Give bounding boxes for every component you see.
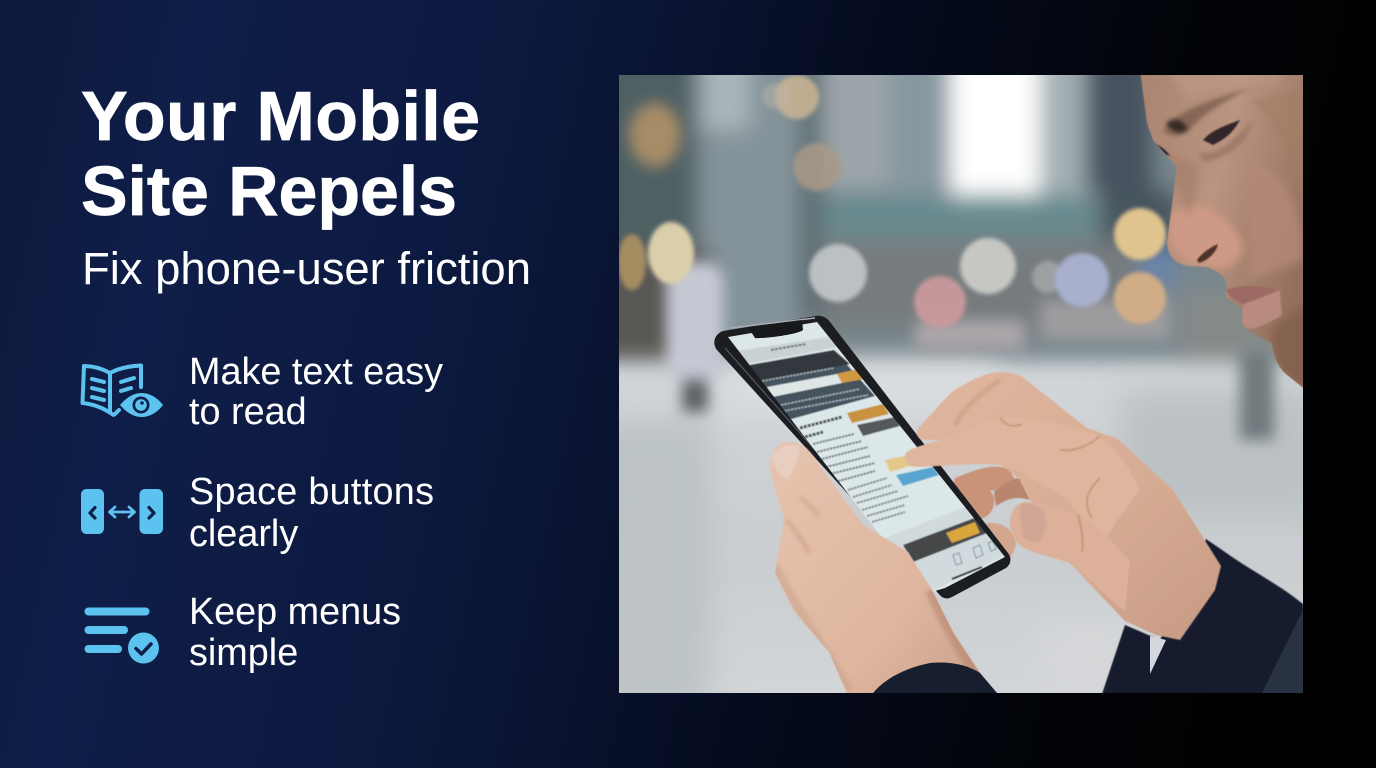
panel: street photo scene (619, 75, 1303, 693)
yellow button (946, 522, 980, 543)
dark header (744, 350, 850, 382)
smartphone (714, 316, 1010, 598)
jacket panel (1262, 610, 1303, 693)
knuckle shading (775, 497, 985, 690)
phone screen (728, 322, 1005, 592)
icon: book with eye (82, 366, 163, 417)
back of hand (917, 372, 1221, 640)
fingers behind the phone (954, 466, 1030, 558)
index finger (905, 418, 1139, 545)
title: Site Repels (81, 152, 457, 230)
phone body (714, 316, 1010, 598)
url bar (738, 337, 838, 364)
search button (836, 369, 864, 383)
blurred pedestrians (666, 262, 1274, 440)
blurred street (619, 346, 1303, 693)
light circles (618, 75, 1166, 328)
search field (767, 374, 842, 397)
content text lines (813, 434, 875, 482)
lower section tint (886, 508, 1002, 590)
subtitle: Fix phone-user friction (82, 243, 531, 294)
orange glow top left (629, 103, 681, 167)
left sleeve (868, 662, 1003, 700)
dark content band (744, 350, 875, 420)
list item: space buttons clearly (81, 471, 434, 555)
label text: to read (189, 391, 307, 433)
icon: menu with check (84, 608, 159, 664)
bottom dark band (903, 517, 987, 562)
title (81, 77, 480, 230)
man's face (1140, 70, 1310, 395)
band text (762, 368, 868, 411)
blue button (896, 467, 939, 486)
bottom nav icons (953, 541, 996, 565)
second text block (848, 478, 908, 522)
list item: make text easy to read (82, 351, 443, 433)
shirt cuff (1150, 636, 1166, 674)
phone side edge highlight (724, 348, 818, 455)
home indicator (952, 567, 982, 579)
label text: Make text easy (189, 351, 443, 393)
left hand holding the phone (770, 442, 984, 693)
title: Your Mobile (81, 77, 480, 155)
thumbnail (1020, 504, 1046, 542)
right sleeve (1100, 539, 1310, 700)
gray button (857, 417, 900, 436)
street shading patches (600, 365, 1320, 710)
pale orange button (885, 455, 913, 472)
list item: keep menus simple (84, 591, 401, 674)
brow and eye details (1156, 77, 1303, 388)
right hand with pointing finger (905, 372, 1221, 640)
icon: spaced buttons (81, 489, 163, 534)
label text: clearly (189, 513, 298, 555)
content heading (800, 417, 842, 437)
bokeh lights (618, 75, 1166, 328)
orange button (847, 404, 889, 423)
phone notch (748, 320, 803, 338)
blurred city buildings (619, 75, 1280, 371)
address text (771, 344, 806, 350)
thumbnail (772, 445, 799, 478)
knuckle creases (955, 380, 1100, 552)
label text: Space buttons (189, 471, 434, 513)
label text: simple (189, 632, 298, 674)
label text: Keep menus (189, 591, 401, 633)
right thumb (1010, 502, 1130, 612)
